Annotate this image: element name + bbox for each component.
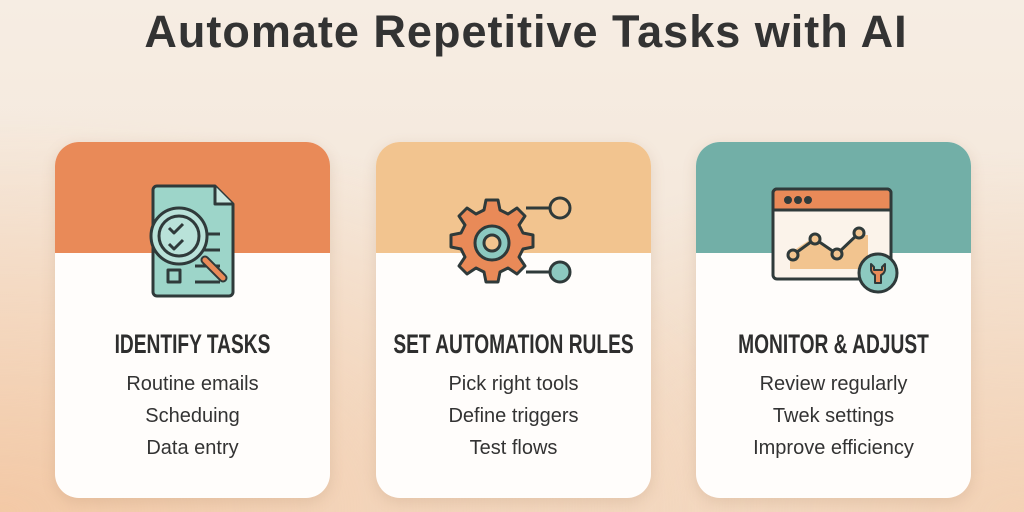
text block: Review regularly — [760, 373, 907, 395]
panel: set automation rules — [376, 142, 651, 498]
text block — [448, 373, 579, 459]
heading: IDENTIFY TASKS — [115, 329, 270, 359]
text block — [753, 373, 914, 459]
title: Automate Repetitive Tasks with AI — [144, 6, 908, 57]
text block — [126, 373, 259, 459]
panel: identify tasks — [55, 142, 330, 498]
text block: Routine emails — [126, 373, 259, 395]
heading: SET AUTOMATION RULES — [393, 329, 634, 359]
text block: Improve efficiency — [753, 437, 914, 459]
text block: Data entry — [146, 437, 239, 459]
text block: Test flows — [470, 437, 557, 459]
icon: dashboard chart with wrench — [772, 188, 898, 294]
icon: gear with nodes — [450, 196, 572, 284]
text block: Scheduing — [145, 405, 240, 427]
icon: document magnifier — [150, 184, 234, 298]
text block: Twek settings — [773, 405, 894, 427]
text block: Define triggers — [448, 405, 579, 427]
heading: MONITOR & ADJUST — [738, 329, 929, 359]
panel: monitor & adjust — [696, 142, 971, 498]
text block: Pick right tools — [448, 373, 579, 395]
